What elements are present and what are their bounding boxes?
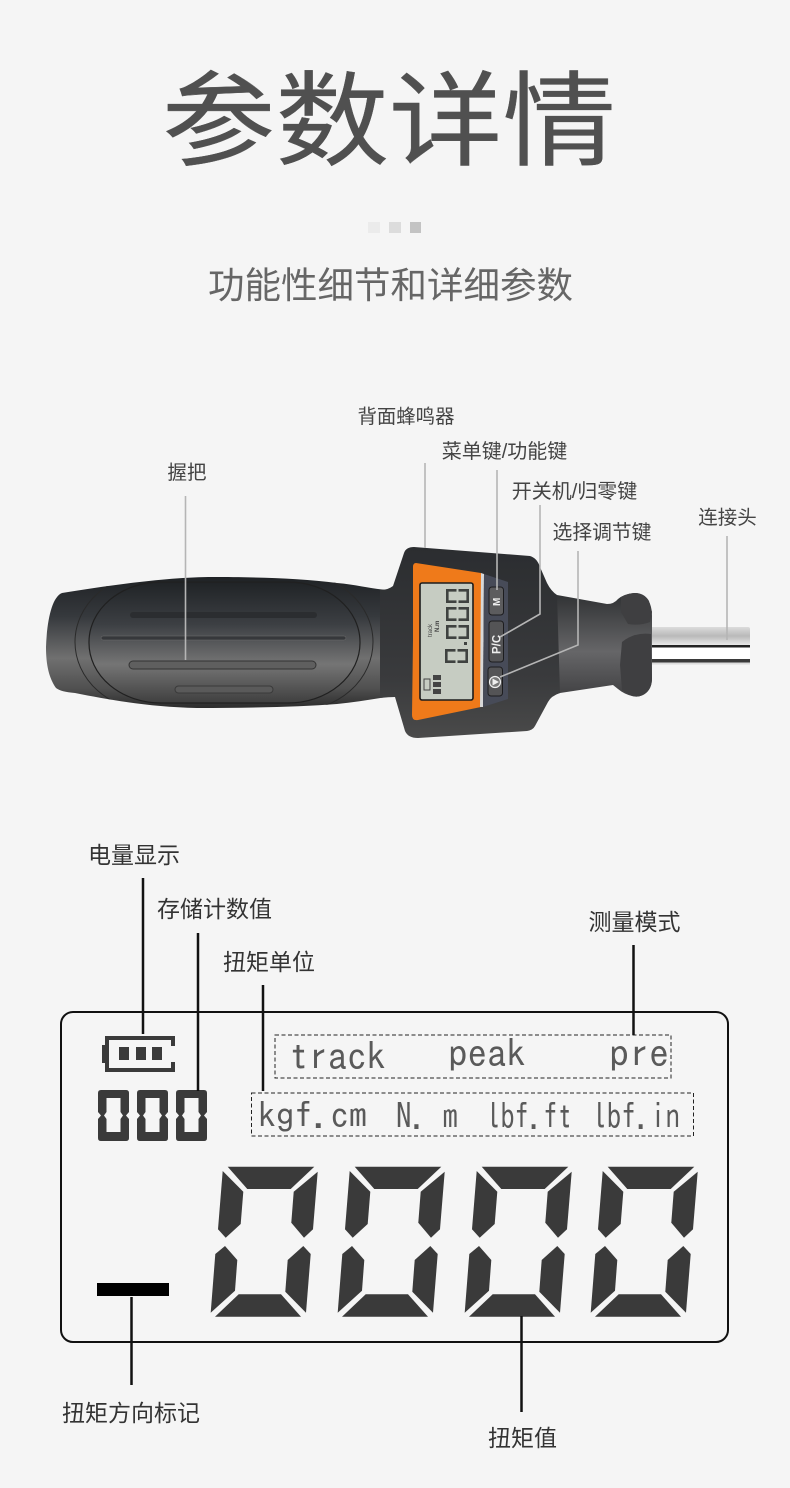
LCD diagram panel	[61, 1012, 728, 1342]
unit box: kgf.cm	[258, 1097, 367, 1133]
LCD screen	[420, 583, 473, 700]
title: 参数详情	[162, 64, 616, 179]
unit box: N. m	[396, 1098, 458, 1134]
mode box: pre	[609, 1034, 669, 1072]
white separator	[480, 573, 484, 707]
product: digital torque screwdriver	[46, 547, 750, 738]
mode box: track	[289, 1037, 386, 1075]
callout: 开关机/归零键: 开关机/归零键	[512, 480, 637, 503]
head body	[380, 547, 560, 738]
button panel	[483, 574, 508, 707]
neck and collar	[530, 590, 652, 702]
callout: 测量模式	[588, 909, 680, 1035]
callout: 连接头: 连接头	[698, 507, 757, 529]
battery icon	[102, 1036, 175, 1072]
unit box: lbf.ft	[486, 1098, 572, 1134]
callout: 扭矩单位: 扭矩单位	[223, 949, 315, 975]
unit box: lbf.in	[592, 1098, 680, 1134]
unit box	[252, 1093, 694, 1136]
callout: 连接头	[698, 507, 757, 640]
button: M	[489, 587, 504, 615]
button: P/C: P/C	[492, 635, 504, 654]
callout: 扭矩值: 扭矩值	[488, 1425, 557, 1451]
stored count digits	[98, 1090, 207, 1141]
mode box: peak	[448, 1034, 526, 1072]
callout: 开关机/归零键	[500, 480, 637, 637]
LCD screen: track	[428, 623, 434, 637]
shaft	[650, 627, 750, 664]
callout: 菜单键/功能键: 菜单键/功能键	[442, 440, 567, 463]
torque value digits	[211, 1167, 698, 1317]
callout: 存储计数值: 存储计数值	[157, 896, 272, 922]
mode box	[275, 1034, 671, 1078]
callout: 握把: 握把	[167, 462, 207, 484]
button: M: M	[492, 598, 503, 606]
title ornament squares	[368, 222, 421, 233]
callout: 背面蜂鸣器: 背面蜂鸣器	[358, 406, 454, 428]
callout: 选择调节键: 选择调节键	[553, 522, 652, 544]
LCD screen: N.m	[435, 621, 441, 632]
button: select	[488, 667, 502, 696]
callout: 扭矩方向标记	[62, 1297, 200, 1426]
callout: 扭矩值	[488, 1316, 557, 1451]
callout: 测量模式: 测量模式	[588, 909, 680, 935]
orange bezel	[412, 563, 481, 720]
callout: 电量显示: 电量显示	[88, 842, 180, 868]
subtitle: 功能性细节和详细参数	[208, 265, 573, 306]
button: P/C	[489, 621, 504, 662]
callout: 扭矩方向标记: 扭矩方向标记	[62, 1400, 200, 1426]
LCD frame	[61, 1012, 728, 1342]
callout: 选择调节键	[500, 522, 652, 677]
handle grip	[46, 573, 392, 711]
collar nut	[620, 593, 652, 697]
direction minus bar	[97, 1283, 169, 1296]
